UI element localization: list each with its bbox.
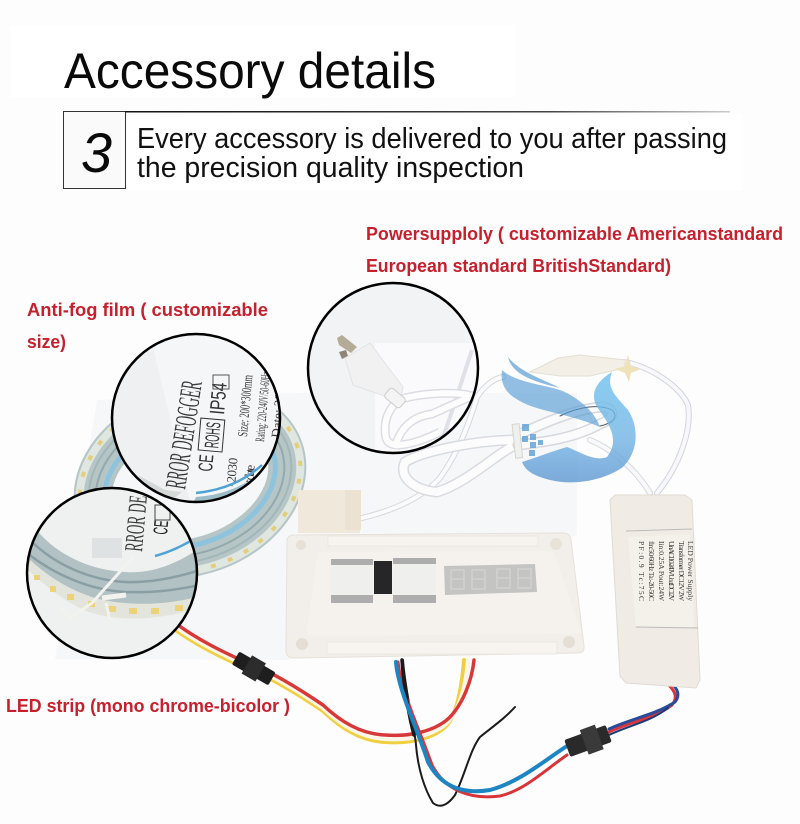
label: power supply: Powersupploly ( customizable Americanstandard — [366, 224, 783, 244]
wires: strip to controller — [177, 625, 474, 742]
wires: controller to transformer — [396, 660, 678, 806]
transformer box: PF:0.9 Tc:75C — [637, 541, 646, 601]
label: LED strip: LED strip (mono chrome-bicolor ) — [6, 696, 290, 716]
watermark logo — [502, 355, 641, 482]
lens: anti-fog film detail: RROR DEFOGGER — [159, 378, 209, 491]
label: power supply — [366, 224, 783, 276]
number box — [64, 112, 126, 188]
lens: anti-fog film detail: Date: 2023 — [268, 380, 288, 438]
subtitle — [137, 123, 727, 184]
connector: transformer wire — [563, 721, 613, 761]
inline plug connector — [530, 355, 625, 376]
transformer box: LED Power Supply — [686, 541, 695, 601]
connector: strip wire — [230, 649, 277, 688]
paper sheet — [55, 393, 577, 660]
anti-fog film roll — [54, 362, 326, 602]
lens: anti-fog film detail: -2030 — [223, 457, 241, 487]
lens: LED strip detail: RROR DE — [119, 494, 153, 553]
lens: anti-fog film detail — [112, 334, 288, 510]
white power cable — [362, 362, 689, 518]
label: anti-fog film: Anti-fog film ( customizable — [27, 300, 268, 320]
title: Accessory details — [64, 43, 436, 99]
label: anti-fog film — [27, 300, 268, 352]
lens: anti-fog film detail: CE — [195, 454, 218, 472]
touch window right — [393, 558, 436, 603]
subtitle: Every accessory is delivered to you after passing — [137, 123, 727, 155]
touch window left — [331, 559, 373, 603]
transformer box: fin:50/60Hz Ta:-20-50C — [647, 541, 656, 601]
black sensor — [374, 561, 392, 594]
lens: anti-fog film detail: IP54 — [206, 381, 232, 415]
terminal block — [298, 490, 361, 533]
transformer box: Uin:AC110-240V Uout:DC12V — [667, 541, 676, 602]
transformer box: Transformer DC12V 2W — [677, 541, 686, 602]
label: anti-fog film: size) — [27, 332, 66, 352]
subtitle: the precision quality inspection — [137, 152, 524, 184]
lens: anti-fog film detail: Rating: 220-240V/50-60Hz — [252, 371, 273, 442]
lens: LED strip detail: CE — [150, 520, 173, 535]
transformer box: Iin:0.25A Pout:24W — [657, 541, 666, 602]
transformer box — [610, 495, 700, 688]
lens: anti-fog film detail: Size: 200*300mm — [236, 374, 256, 437]
controller panel — [286, 533, 584, 658]
lens: LED strip detail — [25, 488, 200, 658]
digital display — [444, 564, 537, 595]
lens: anti-fog film detail: Test date — [240, 464, 258, 495]
lens: power plug detail — [308, 283, 478, 453]
label: power supply: European standard BritishStandard) — [366, 256, 671, 276]
lens: anti-fog film detail: ROHS — [201, 421, 226, 449]
number box: 3 — [81, 121, 112, 184]
